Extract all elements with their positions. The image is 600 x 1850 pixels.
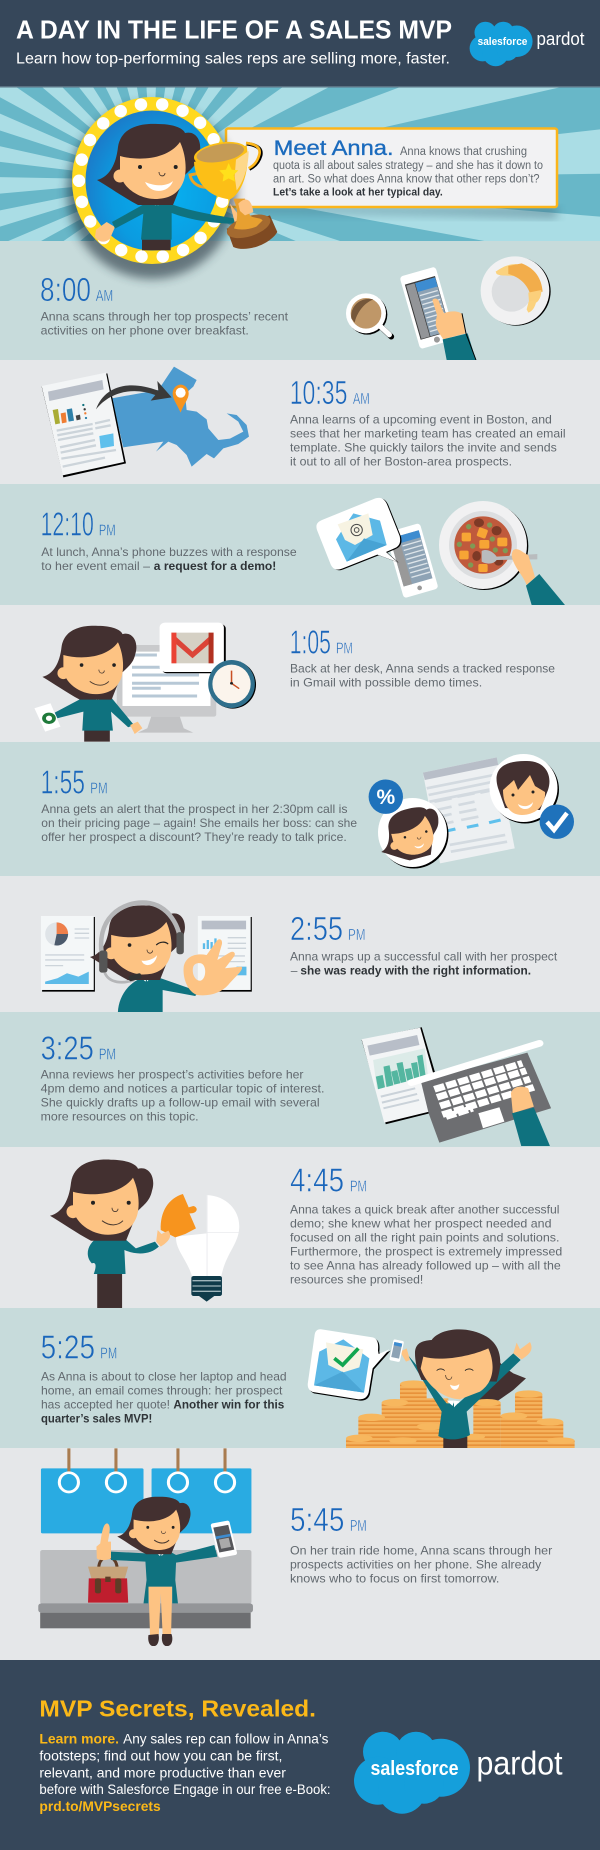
icon: phone — [210, 1520, 237, 1558]
icon: left report — [41, 916, 95, 992]
text: 10:35 description — [290, 412, 566, 468]
illustration: pricing page — [423, 757, 515, 863]
icon: coffee cup — [346, 293, 391, 337]
text: call to action: before with Salesforce Engage in our free e-Book: — [39, 1782, 331, 1797]
time: 10:35 am: 10:35 — [290, 374, 348, 411]
text: 1:55 description: Anna gets an alert that the prospect in her 2:30pm call is — [41, 802, 348, 816]
text: 8:00 description — [41, 310, 289, 338]
icon: trophy — [190, 138, 277, 249]
heading: Meet Anna: Meet Anna. — [274, 137, 394, 160]
time: 5:45 pm: 5:45 — [290, 1501, 344, 1538]
icon: typing hand — [511, 1087, 550, 1146]
text: 5:45 description: On her train ride home, Anna scans through her — [290, 1543, 552, 1557]
text: call to action: relevant, and more productive than ever — [39, 1765, 286, 1780]
text: 5:45 description: knows who to focus on first tomorrow. — [290, 1571, 499, 1585]
text: 12:10 description: to her event email – — [41, 559, 150, 573]
text: 4:45 description: Anna takes a quick break after another successful — [290, 1202, 560, 1216]
icon: Anna in circle — [372, 798, 448, 868]
text: call to action: Learn more. — [39, 1731, 119, 1746]
time: 1:55 pm: PM — [90, 780, 108, 797]
figure: Anna head — [415, 1329, 500, 1399]
time: 1:55 pm: 1:55 — [41, 763, 85, 800]
time: 5:45 pm: PM — [350, 1518, 367, 1535]
figure: Anna body — [95, 199, 242, 250]
figure: Anna body — [118, 977, 199, 1012]
text: call to action — [39, 1731, 331, 1814]
time: 8:00 am: 8:00 — [40, 271, 91, 308]
card: Meet Anna text — [226, 128, 557, 218]
text: 5:25 description: has accepted her quote! — [41, 1397, 170, 1411]
text: 5:25 description: As Anna is about to close her laptop and head — [41, 1369, 287, 1383]
text: intro copy: Let’s take a look at her typical day. — [273, 187, 443, 199]
icon: handbag — [88, 1557, 128, 1603]
hero panel: Meet Anna — [0, 88, 600, 286]
icon: percent badge — [369, 780, 403, 814]
time: 2:55 pm: PM — [348, 927, 366, 944]
text: 4:45 description: resources she promised! — [290, 1272, 423, 1286]
text: 5:25 description: home, an email comes through: her prospect — [41, 1383, 283, 1397]
text: 3:25 description: 4pm demo and notices a particular topic of interest. — [41, 1082, 324, 1096]
text: 12:10 description: At lunch, Anna’s phone buzzes with a response — [41, 545, 297, 559]
text: 2:55 description: – — [291, 963, 298, 977]
logo: salesforce pardot large — [354, 1732, 562, 1814]
illustration: Anna celebrating with coins — [308, 1329, 575, 1448]
title: A DAY IN THE LIFE OF A SALES MVP — [16, 16, 452, 44]
time: 4:45 pm: PM — [350, 1179, 367, 1196]
text: 4:45 description: to see Anna has already followed up – with all the — [290, 1258, 561, 1272]
time: 1:05 pm: PM — [336, 640, 353, 657]
time: 3:25 pm: PM — [99, 1046, 116, 1063]
text: intro copy: Anna knows that crushing — [400, 146, 527, 158]
coin stacks — [346, 1380, 575, 1448]
logo: salesforce pardot — [470, 22, 584, 66]
text: 5:45 description — [290, 1543, 552, 1585]
illustration: report and laptop — [362, 1027, 551, 1146]
figure: Anna head — [97, 124, 200, 205]
icon: phone — [389, 1339, 404, 1362]
text: 12:10 description: a request for a demo! — [154, 559, 276, 573]
panel: 5:45 pm — [0, 1448, 600, 1660]
figure: Anna head — [42, 626, 136, 700]
time: 1:05 pm: 1:05 — [290, 623, 331, 660]
text: 1:05 description — [290, 661, 555, 689]
text: 8:00 description: Anna scans through her top prospects’ recent — [41, 310, 289, 324]
icon: soup bowl — [439, 501, 528, 590]
panel: 5:25 pm — [0, 1308, 600, 1448]
text: call to action: Any sales rep can follow in Anna’s — [123, 1731, 329, 1746]
text: 1:05 description: Back at her desk, Anna sends a tracked response — [290, 661, 555, 675]
illustration: report, Massachusetts map and pin — [42, 367, 249, 477]
time: 12:10 pm: 12:10 — [41, 505, 94, 542]
figure: Anna head — [117, 1497, 191, 1554]
panel: 10:35 am — [0, 360, 600, 484]
time: 3:25 pm: 3:25 — [41, 1029, 94, 1066]
text: 1:55 description: on their pricing page – again! She emails her boss: can she — [41, 816, 357, 830]
figure: Anna body — [88, 1230, 170, 1308]
text: intro copy: quota is all about sales strategy – and she has it down to — [273, 160, 543, 172]
icon: right report — [198, 916, 252, 992]
panel: 2:55 pm — [0, 876, 600, 1012]
time: 8:00 am: AM — [96, 288, 113, 305]
time: 2:55 pm: 2:55 — [290, 910, 343, 947]
text: 5:25 description: quarter’s sales MVP! — [41, 1411, 152, 1425]
subtitle: Learn how top-performing sales reps are selling more, faster. — [16, 50, 450, 67]
icon: laptop — [411, 1043, 551, 1143]
text: 10:35 description: template. She quickly tailors the invite and sends — [290, 440, 557, 454]
train windows and straps — [41, 1448, 251, 1533]
text: intro copy — [273, 146, 543, 199]
text: 3:25 description — [41, 1068, 324, 1124]
text: 10:35 description: sees that her marketing team has created an email — [290, 426, 566, 440]
icon: lightbulb — [176, 1195, 239, 1302]
medallion: Anna with trophy — [67, 97, 277, 279]
icon: email speech bubble — [316, 498, 401, 570]
panel: 1:05 pm — [0, 605, 600, 742]
icon: Gmail tile — [160, 623, 226, 673]
icon: prospect in circle — [490, 754, 559, 824]
icon: monitor — [117, 645, 216, 733]
time: 12:10 pm: PM — [99, 522, 116, 539]
illustration: lightbulb puzzle — [88, 1194, 239, 1308]
heading: MVP Secrets, Revealed.: MVP Secrets, Revealed. — [39, 1696, 316, 1722]
time: 5:25 pm: PM — [100, 1345, 117, 1362]
icon: hand with spoon — [482, 549, 565, 605]
icon: plate with croissant — [481, 256, 551, 326]
figure: Anna seated body — [96, 1523, 217, 1646]
text: call to action: prd.to/MVPsecrets — [39, 1799, 161, 1814]
time: 10:35 am: AM — [353, 391, 370, 408]
text: 2:55 description: Anna wraps up a successful call with her prospect — [290, 949, 558, 963]
text: 3:25 description: more resources on this topic. — [41, 1110, 199, 1124]
text: 10:35 description: it out to all of her Boston-area prospects. — [290, 454, 512, 468]
logo: salesforce pardot large: pardot — [476, 1744, 562, 1781]
text: 4:45 description: Furthermore, the prospect is extremely impressed — [290, 1244, 562, 1258]
illustration: reports — [41, 916, 252, 1012]
text: 4:45 description — [290, 1202, 562, 1286]
icon: check badge — [540, 804, 574, 839]
time: 5:25 pm: 5:25 — [41, 1328, 95, 1365]
logo: salesforce pardot: pardot — [536, 29, 584, 49]
arrow: report to map — [96, 381, 172, 409]
text: 8:00 description: activities on her phone over breakfast. — [41, 324, 249, 338]
panel: 1:55 pm — [0, 742, 600, 876]
time: 4:45 pm: 4:45 — [290, 1162, 344, 1199]
illustration: monitor, Gmail tile, clock — [34, 623, 256, 742]
text: call to action: footsteps; find out how you can be first, — [39, 1748, 282, 1763]
text: 2:55 description: she was ready with the right information. — [300, 963, 531, 977]
text: 12:10 description — [41, 545, 297, 573]
text: 5:45 description: prospects activities on her phone. She already — [290, 1557, 541, 1571]
text: 3:25 description: Anna reviews her prospect’s activities before her — [41, 1068, 304, 1082]
icon: clock — [208, 660, 256, 709]
text: 5:25 description: Another win for this — [173, 1397, 285, 1411]
text: 10:35 description: Anna learns of a upcoming event in Boston, and — [290, 412, 552, 426]
icon: OK hand — [184, 939, 242, 995]
panel: 8:00 am — [0, 240, 600, 360]
figure: Anna head with headset — [90, 903, 185, 982]
panel: 12:10 pm — [0, 484, 600, 605]
text: intro copy: an art. So what does Anna know that other reps don’t? — [273, 173, 540, 185]
illustration: train seat — [38, 1448, 253, 1646]
text: 3:25 description: She quickly drafts up a follow-up email with several — [41, 1096, 320, 1110]
figure: Anna raised arms — [400, 1342, 532, 1448]
icon: email bubble — [308, 1329, 391, 1401]
text: 4:45 description: focused on all the right pain points and solutions. — [290, 1230, 560, 1244]
icon: percent badge: % — [376, 786, 395, 809]
figure: back hair — [473, 1350, 526, 1402]
text: 1:55 description — [41, 802, 357, 844]
illustration: email bubble, phone and soup — [316, 498, 565, 605]
logo: salesforce pardot large: salesforce — [370, 1758, 458, 1780]
panel: 4:45 pm — [0, 1147, 600, 1308]
figure: Anna body with coffee — [34, 693, 142, 742]
figure: Anna head — [50, 1160, 153, 1241]
text: 4:45 description: demo; she knew what her prospect needed and — [290, 1216, 552, 1230]
text: 5:25 description — [41, 1369, 287, 1425]
logo: salesforce pardot: salesforce — [478, 36, 527, 48]
header — [0, 0, 600, 88]
text: 1:05 description: in Gmail with possible demo times. — [290, 675, 482, 689]
train seat — [38, 1550, 253, 1628]
icon: puzzle piece — [161, 1194, 197, 1237]
footer — [0, 1660, 600, 1850]
illustration: breakfast, phone and hand — [346, 256, 551, 360]
icon: report with bars — [362, 1027, 446, 1124]
panel: 3:25 pm — [0, 1012, 600, 1147]
text: 1:55 description: offer her prospect a discount? They’re ready to talk price. — [41, 830, 347, 844]
sunburst background — [0, 88, 600, 241]
icon: report page — [42, 373, 126, 477]
icon: phone — [385, 523, 439, 598]
text: 2:55 description — [290, 949, 558, 977]
icon: phone with hand — [400, 267, 476, 360]
map: Massachusetts — [112, 367, 249, 467]
icon: map pin — [173, 385, 189, 413]
